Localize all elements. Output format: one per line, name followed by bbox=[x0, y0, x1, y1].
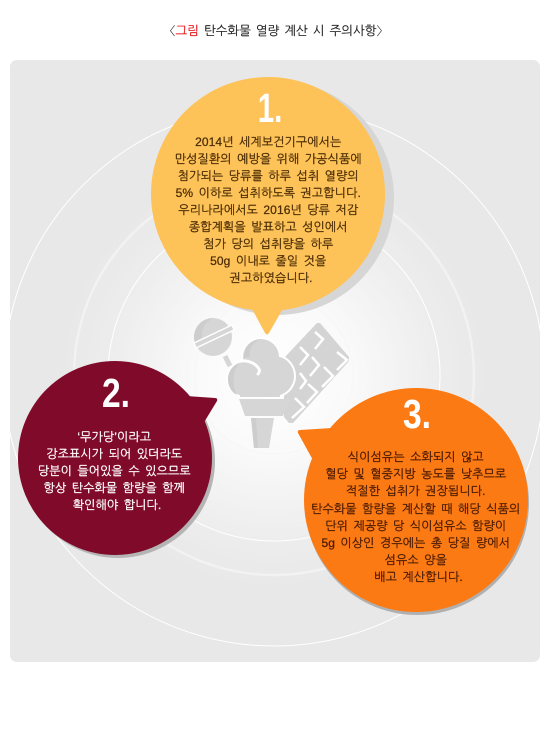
icon: ice cream bbox=[226, 337, 296, 448]
shadow: callout 3 bbox=[305, 391, 529, 615]
number 3: 3. bbox=[403, 391, 431, 437]
shadow: callout 2 bbox=[21, 364, 215, 558]
text: callout 3 body: 탄수화물 함량을 계산할 때 해당 식품의 bbox=[311, 502, 520, 516]
text: callout 1 body: 만성질환의 예방을 위해 가공식품에 bbox=[175, 152, 362, 166]
text: callout 2 body: ‘무가당’이라고 bbox=[77, 430, 151, 444]
speech bubble 3 bbox=[298, 388, 528, 612]
text: callout 3 body: 적절한 섭취가 권장됩니다. bbox=[346, 484, 486, 498]
speech bubble 2 bbox=[18, 361, 217, 555]
text: callout 3 body: 단위 제공량 당 식이섬유소 함량이 bbox=[325, 519, 506, 533]
text: callout 2 body: 항상 탄수화물 함량을 함께 bbox=[44, 481, 185, 495]
text: callout 1 body: 2014년 세계보건기구에서는 bbox=[195, 135, 341, 149]
panel: callout 1 bbox=[151, 77, 394, 334]
text: callout 1 body: 우리나라에서도 2016년 당류 저감 bbox=[178, 203, 358, 217]
text: callout 1 body: 종합계획을 발표하고 성인에서 bbox=[189, 220, 348, 234]
text: callout 3 body: 식이섬유는 소화되지 않고 bbox=[348, 450, 484, 464]
text: callout 3 body: 5g 이상인 경우에는 총 당질 량에서 bbox=[321, 536, 510, 550]
text: callout 1 body: 첨가 당의 섭취량을 하루 bbox=[203, 237, 333, 251]
text: callout 2 body: 강조표시가 되어 있더라도 bbox=[46, 447, 182, 461]
number 2: 2. bbox=[102, 370, 130, 416]
speech bubble 1 bbox=[151, 77, 385, 334]
title: 〈그림 탄수화물 열량 계산 시 주의사항〉 bbox=[170, 24, 383, 38]
text: callout 2 body: 당분이 들어있을 수 있으므로 bbox=[38, 464, 191, 478]
text: callout 1 body: 5% 이하로 섭취하도록 권고합니다. bbox=[176, 186, 361, 200]
number 1: 1. bbox=[258, 85, 282, 131]
icon: chocolate bar bbox=[284, 323, 349, 423]
text: callout 1 body: 권고하였습니다. bbox=[229, 271, 313, 285]
text: callout 3 body: 배고 계산합니다. bbox=[374, 570, 463, 584]
panel: callout 2 bbox=[18, 361, 217, 558]
text: callout 1 body: 50g 이내로 줄일 것을 bbox=[210, 254, 326, 268]
panel: callout 3 bbox=[298, 388, 529, 615]
text: callout 3 body: 섬유소 양을 bbox=[385, 553, 447, 567]
text: callout 2 body: 확인해야 합니다. bbox=[73, 498, 161, 512]
icon: lollipop bbox=[194, 318, 234, 366]
shadow: callout 1 bbox=[160, 81, 394, 315]
text: callout 3 body: 혈당 및 혈중지방 농도를 낮추므로 bbox=[325, 467, 506, 481]
icon: sweets (lollipop, chocolate, ice cream) bbox=[194, 318, 349, 448]
text: callout 1 body: 첨가되는 당류를 하루 섭취 열량의 bbox=[178, 169, 359, 183]
